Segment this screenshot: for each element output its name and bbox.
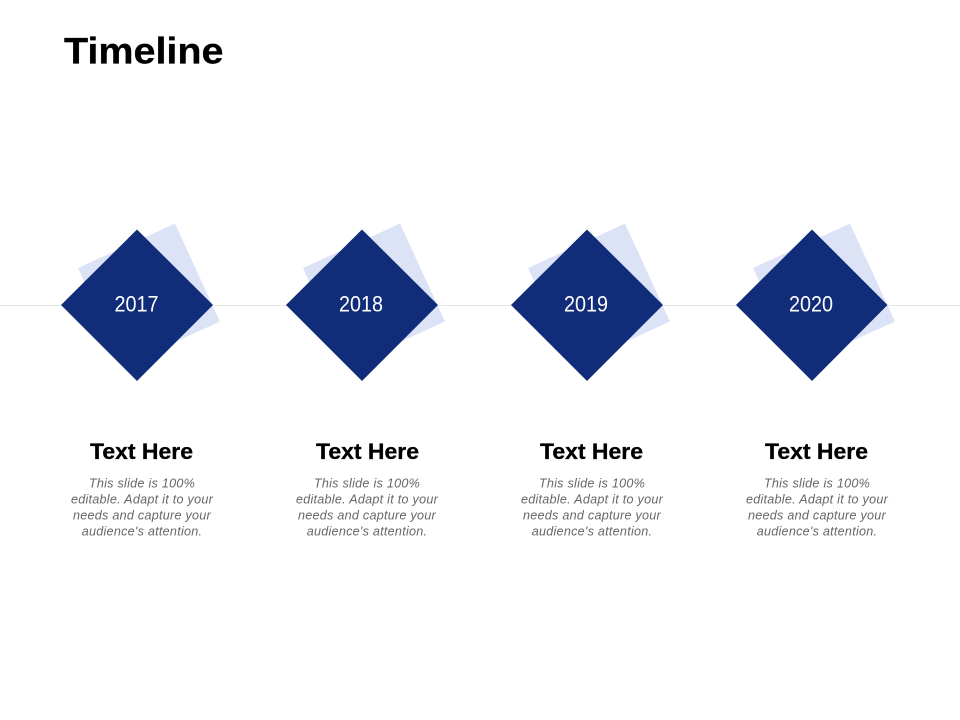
description 2020: editable. Adapt it to your [746,492,889,506]
heading 2018: Text Here [316,439,419,464]
icon: light square 2020 [753,224,895,366]
timeline item: 2020 [736,224,895,538]
description 2020: audience's attention. [757,524,877,538]
diamond 2017 [61,230,213,381]
year 2018: 2018 [339,292,383,316]
description 2018: needs and capture your [298,508,437,522]
timeline item: 2018 [286,224,445,538]
description 2017: This slide is 100% [89,476,195,490]
description 2019: This slide is 100% [539,476,645,490]
description 2018: audience's attention. [307,524,427,538]
diamond 2019 [511,230,663,381]
diamond 2018 [286,230,438,381]
diamond 2020 [736,230,888,381]
year 2017: 2017 [114,292,158,316]
icon: light square 2017 [78,224,220,366]
description 2019: audience's attention. [532,524,652,538]
description 2018: editable. Adapt it to your [296,492,439,506]
heading 2017: Text Here [90,439,193,464]
description 2017: editable. Adapt it to your [71,492,214,506]
description 2019: needs and capture your [523,508,662,522]
heading 2019: Text Here [540,439,643,464]
year 2019: 2019 [564,292,608,316]
description 2018: This slide is 100% [314,476,420,490]
description 2019: editable. Adapt it to your [521,492,664,506]
description 2017: audience's attention. [82,524,202,538]
icon: light square 2019 [528,224,670,366]
description 2020: needs and capture your [748,508,887,522]
heading 2020: Text Here [765,439,868,464]
icon: light square 2018 [303,224,445,366]
timeline item: 2019 [511,224,670,538]
year 2020: 2020 [789,292,833,316]
description 2020: This slide is 100% [764,476,870,490]
timeline item: 2017 [61,224,220,538]
title: Timeline [64,30,224,72]
description 2017: needs and capture your [73,508,212,522]
